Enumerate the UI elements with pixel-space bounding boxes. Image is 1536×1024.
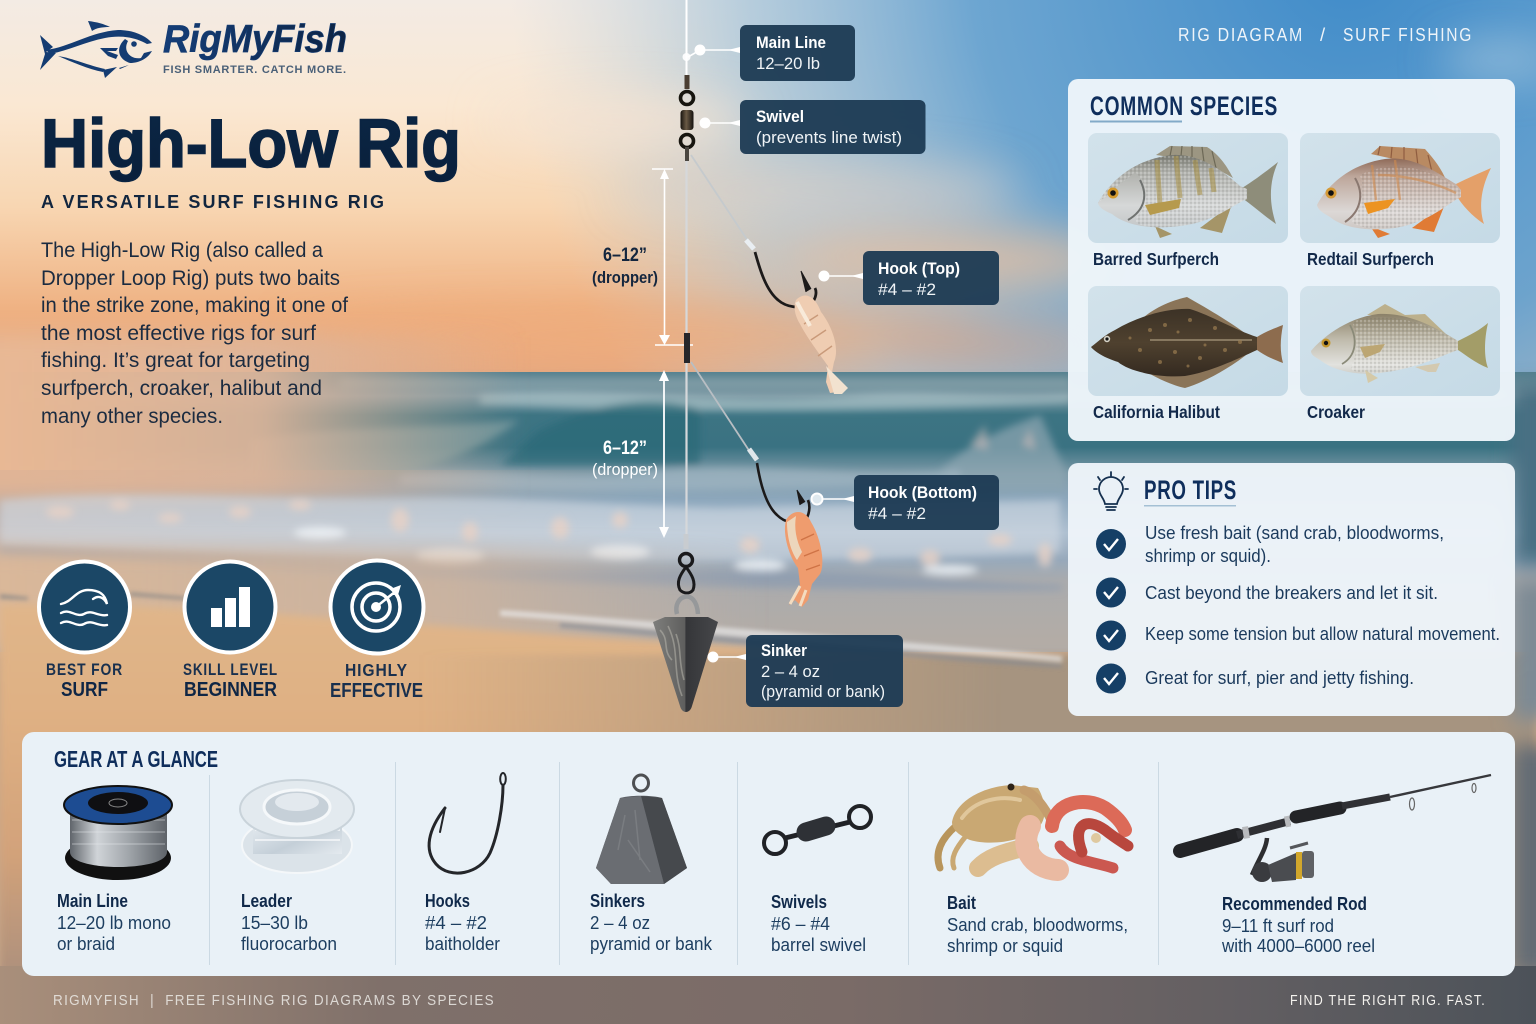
gear: recommended rod: Recommended Rod [1222,894,1367,914]
dimension: upper dropper: 6–12” [603,245,647,266]
tip 4 [1096,664,1414,694]
gear: hooks [425,773,506,954]
gear: swivels: Swivels [771,892,827,912]
icon: rod and reel [1180,775,1491,882]
callout: bottom hook [812,475,999,530]
badge: highly effective: HIGHLY [345,660,408,680]
gear: recommended rod: with 4000–6000 reel [1221,936,1375,956]
bottom shrimp [785,512,822,607]
dimension: lower dropper [592,370,669,538]
callout: top hook [818,251,999,305]
gear: swivels: #6 – #4 [771,914,830,934]
intro paragraph: the most effective rigs for surf [41,322,316,345]
label: redtail surfperch: Redtail Surfperch [1307,249,1434,269]
gear: bait [938,784,1128,956]
intro paragraph: surfperch, croaker, halibut and [41,377,322,400]
heading: pro tips [1144,475,1237,506]
label: croaker: Croaker [1307,402,1365,422]
icon: logo fish [40,21,152,78]
logo: RigMyFish [40,18,347,78]
gear: sinkers: pyramid or bank [590,934,713,954]
panel: pro tips [1068,463,1515,716]
gear: main line: Main Line [57,891,128,911]
icon: line spool [64,786,172,880]
sinker link [676,534,698,614]
rig diagram [592,0,999,712]
gear: main line: or braid [57,934,115,954]
lower dropper leader [691,362,750,452]
icon: bait pile [938,784,1128,870]
callout: sinker: (pyramid or bank) [761,682,885,701]
icon: hook [429,773,506,873]
tip 1 [1096,523,1444,566]
intro paragraph: fishing. It’s great for targeting [41,349,310,372]
callout: bottom hook: Hook (Bottom) [868,483,977,502]
gear: leader: Leader [241,891,292,911]
intro paragraph: many other species. [41,405,223,428]
intro paragraph: in the strike zone, making it one of [41,294,348,317]
callout: swivel [700,100,926,154]
label: california halibut: California Halibut [1093,402,1220,422]
tip 1: Use fresh bait (sand crab, bloodworms, [1145,523,1444,543]
gear: sinkers: Sinkers [590,891,645,911]
vertical leader line [685,158,688,535]
species: redtail surfperch [1300,133,1500,243]
intro paragraph: Dropper Loop Rig) puts two baits [41,267,340,290]
callout: sinker: Sinker [761,641,807,660]
icon: barrel swivel [764,806,871,854]
gear: sinkers [590,775,713,954]
header label: rig diagram / surf fishing: RIG DIAGRAM [1178,24,1304,45]
tip 2: Cast beyond the breakers and let it sit. [1145,583,1438,603]
gear: sinkers: 2 – 4 oz [590,913,650,933]
footer right: FIND THE RIGHT RIG. FAST. [1290,992,1486,1009]
heading: common species: COMMON SPECIES [1090,91,1278,121]
upper dropper leader [691,155,748,241]
dimension: upper dropper: (dropper) [592,269,658,287]
callout: main line: Main Line [756,33,826,52]
badge: skill level beginner [183,562,278,701]
gear: recommended rod [1180,775,1491,956]
callout: bottom hook: #4 – #2 [868,504,926,523]
badge: best for surf: SURF [61,679,108,701]
badge: skill level beginner: SKILL LEVEL [183,661,278,679]
tip 2 [1096,578,1438,608]
label: barred surfperch: Barred Surfperch [1093,249,1219,269]
callout: swivel: (prevents line twist) [756,128,902,147]
logo: RigMyFish: RigMyFish [163,18,347,61]
top shrimp [795,296,848,394]
top hook [746,240,816,307]
header label: rig diagram / surf fishing: / [1320,24,1327,45]
gear: leader: 15–30 lb [241,913,308,933]
gear: swivels [764,806,871,955]
tip 4: Great for surf, pier and jetty fishing. [1145,668,1414,688]
icon: bar chart [184,562,276,652]
dimension: upper dropper [592,169,693,345]
gear: recommended rod: 9–11 ft surf rod [1222,916,1334,936]
heading: gear at a glance: GEAR AT A GLANCE [54,746,218,772]
callout: sinker: 2 – 4 oz [761,662,820,681]
gear: bait: Bait [947,893,976,913]
callout: top hook: #4 – #2 [878,280,936,299]
gear: swivels: barrel swivel [771,935,866,955]
gear: main line: 12–20 lb mono [57,913,171,933]
callout: top hook: Hook (Top) [878,259,960,278]
callout: swivel: Swivel [756,107,804,126]
gear: bait: shrimp or squid [947,936,1063,956]
tip 3 [1096,620,1500,650]
callout: main line [682,25,855,81]
heading: pro tips: PRO TIPS [1144,475,1237,505]
intro paragraph [41,239,348,428]
callout: main line: 12–20 lb [756,54,820,73]
tip 3: Keep some tension but allow natural movement. [1145,624,1500,644]
badge: best for surf: BEST FOR [46,661,123,679]
dimension: lower dropper: (dropper) [592,461,658,479]
footer left: RIGMYFISH | FREE FISHING RIG DIAGRAMS BY SPECIES [53,992,495,1009]
panel: gear at a glance [22,732,1515,976]
gear: bait: Sand crab, bloodworms, [947,915,1128,935]
intro paragraph: The High-Low Rig (also called a [41,239,323,262]
logo: RigMyFish: FISH SMARTER. CATCH MORE. [163,64,346,76]
species: croaker [1300,286,1500,396]
gear: leader [240,780,354,954]
badge: highly effective: EFFECTIVE [330,680,423,702]
gear: hooks: #4 – #2 [425,913,487,933]
species: california halibut [1088,286,1288,396]
species: barred surfperch [1088,133,1288,243]
badge: highly effective [330,560,424,702]
subtitle: A VERSATILE SURF FISHING RIG [41,192,384,212]
dropper knot [684,333,690,363]
icon: leader spool [240,780,354,873]
header label: rig diagram / surf fishing: SURF FISHING [1343,24,1473,45]
callout: sinker [708,635,903,707]
gear: hooks: baitholder [425,934,500,954]
sinker [653,617,718,712]
icon: light bulb [1094,472,1128,510]
main line [686,0,688,76]
icon: waves [39,562,130,652]
swivel [680,75,694,161]
gear: main line [57,786,172,954]
bottom hook [749,449,809,523]
gear: hooks: Hooks [425,891,470,911]
gear: leader: fluorocarbon [241,934,337,954]
panel: common species [1068,79,1515,441]
badge: skill level beginner: BEGINNER [184,679,277,701]
icon: pyramid sinker [596,775,687,884]
title: High-Low Rig [41,105,461,182]
header label: rig diagram / surf fishing [1178,24,1473,45]
badge: best for surf [39,562,130,701]
icon: target [330,560,424,654]
tip 1: shrimp or squid). [1145,546,1271,566]
dimension: lower dropper: 6–12” [603,438,647,459]
